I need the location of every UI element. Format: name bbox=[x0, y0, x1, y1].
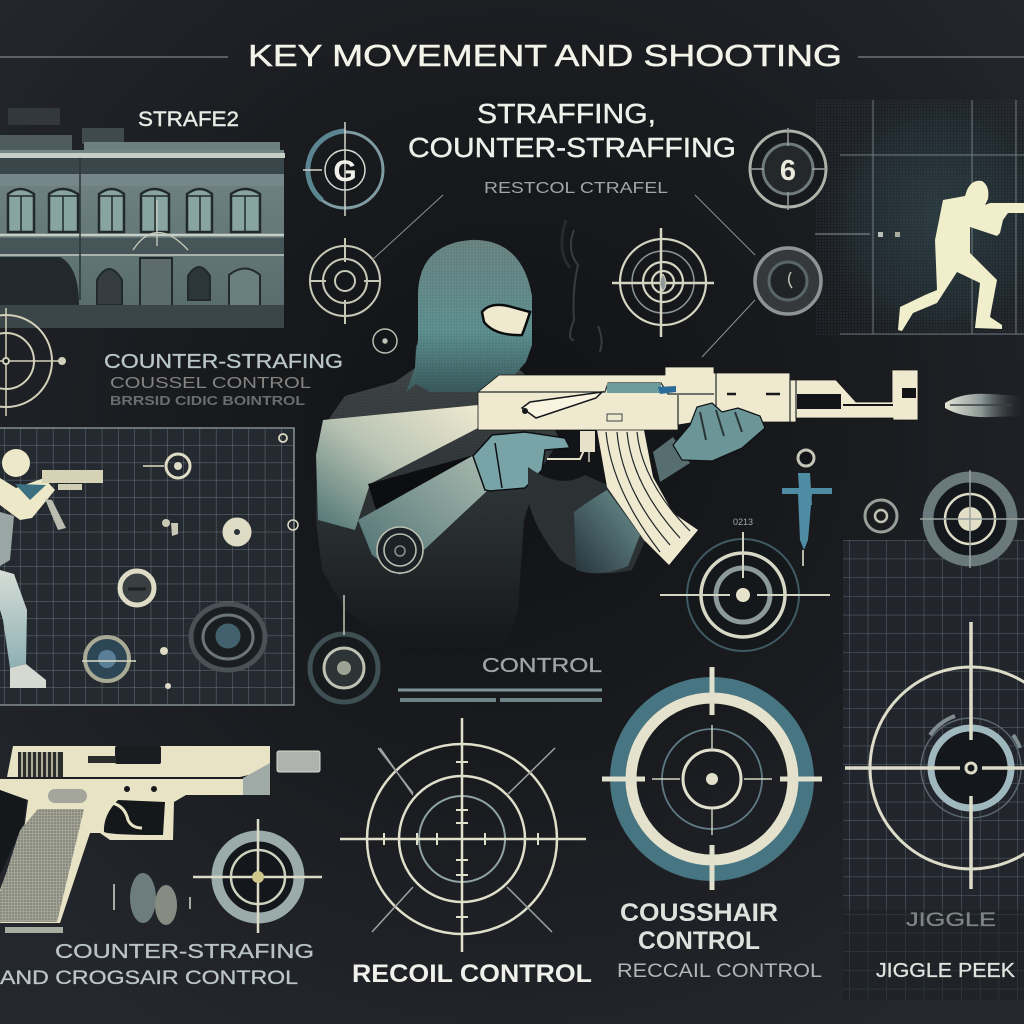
panel: left grid with shooter bbox=[0, 428, 298, 705]
caption: reccail control: RECCAIL CONTROL bbox=[617, 961, 822, 982]
icon: G reticle: G bbox=[333, 155, 357, 188]
grid icons bbox=[82, 434, 298, 689]
icon: reticle left edge bbox=[0, 308, 65, 416]
balaclava head bbox=[406, 240, 532, 392]
icon: pistol reticle bbox=[193, 819, 322, 933]
right arm bbox=[528, 467, 650, 573]
forearm bbox=[358, 455, 488, 575]
pistol shooter bbox=[0, 449, 103, 688]
caption: counter-strafing and crossair control: COUNTER-STRAFING bbox=[55, 941, 314, 963]
trigger guard bbox=[104, 800, 165, 835]
building ground arches bbox=[0, 258, 260, 310]
pistol frame bbox=[0, 779, 243, 923]
dark sleeve band bbox=[368, 455, 476, 510]
label: strafe2: STRAFE2 bbox=[138, 108, 239, 131]
right glove bbox=[673, 403, 765, 461]
building windows bbox=[8, 189, 260, 232]
sublabel stack: counter-strafing: COUNTER-STRAFING bbox=[104, 351, 343, 373]
icon: blurred lens bbox=[114, 873, 190, 925]
caption: jiggle peek: JIGGLE PEEK bbox=[876, 960, 1016, 982]
arm reticle bbox=[377, 527, 423, 573]
trigger guard bbox=[547, 448, 585, 459]
icon: dark lens reticle bbox=[310, 595, 378, 702]
icon: top center reticle bbox=[612, 228, 714, 337]
icon: smoke bbox=[562, 220, 602, 352]
heading: straffing, counter-straffing: STRAFFING, bbox=[477, 98, 656, 129]
sublabel stack: counter-strafing: BRRSID CIDIC BOINTROL bbox=[110, 393, 305, 408]
receiver bbox=[478, 367, 918, 430]
rifle bbox=[478, 367, 918, 565]
icon: thick ring lens bbox=[920, 470, 1024, 568]
icon: center lower reticle bbox=[660, 517, 830, 651]
icon: small top-right lens bbox=[865, 500, 897, 532]
pistol bbox=[0, 746, 320, 933]
icon: reticle left bbox=[310, 195, 443, 324]
sublabel: restcol ctrafel: RESTCOL CTRAFEL bbox=[484, 180, 668, 197]
icon: G reticle bbox=[303, 122, 383, 216]
heading: straffing, counter-straffing: COUNTER-STRAFFING bbox=[408, 132, 736, 163]
icon: 6 reticle: 6 bbox=[780, 155, 796, 187]
left glove bbox=[473, 432, 570, 491]
figure: masked shooter bbox=[316, 240, 690, 650]
icon: 6 reticle bbox=[750, 128, 826, 210]
sublabel stack: counter-strafing bbox=[104, 351, 343, 408]
pistol slide bbox=[7, 746, 270, 777]
heading: straffing, counter-straffing bbox=[408, 98, 736, 163]
panel: building bbox=[0, 108, 285, 328]
barrel bbox=[277, 751, 320, 772]
caption: recoil control: RECOIL CONTROL bbox=[352, 960, 592, 988]
icon: scope reticle bbox=[695, 195, 821, 357]
icon: recoil reticle bbox=[340, 718, 586, 952]
eye slit bbox=[482, 305, 530, 335]
bullet bbox=[945, 394, 1024, 417]
icon: teal ring reticle bbox=[602, 667, 822, 890]
figure body bbox=[316, 345, 560, 650]
sublabel stack: counter-strafing: COUSSEL CONTROL bbox=[110, 375, 311, 392]
barrel and front sight bbox=[797, 394, 841, 409]
caption: cousshair control bbox=[620, 899, 778, 955]
magazine bbox=[597, 430, 698, 565]
stock and shoulder highlight bbox=[316, 405, 478, 530]
panel: right grid with reticle bbox=[843, 540, 1024, 1000]
caption: counter-strafing and crossair control bbox=[0, 941, 314, 989]
panel: running soldier bbox=[815, 100, 1024, 336]
label: control: CONTROL bbox=[482, 655, 602, 677]
caption: counter-strafing and crossair control: AND CROGSAIR CONTROL bbox=[0, 968, 298, 989]
backstrap bbox=[0, 790, 26, 875]
caption: cousshair control: CONTROL bbox=[638, 927, 760, 955]
pistol grip texture bbox=[0, 809, 84, 922]
icon: center lower reticle: 0213 bbox=[733, 517, 753, 527]
icon: small reticle bbox=[373, 329, 397, 353]
soldier silhouette bbox=[898, 181, 1024, 331]
icon: blue pin crosshair bbox=[782, 450, 832, 566]
caption: jiggle: JIGGLE bbox=[906, 910, 996, 931]
caption: cousshair control: COUSSHAIR bbox=[620, 899, 778, 927]
title: KEY MOVEMENT AND SHOOTING bbox=[248, 38, 842, 73]
